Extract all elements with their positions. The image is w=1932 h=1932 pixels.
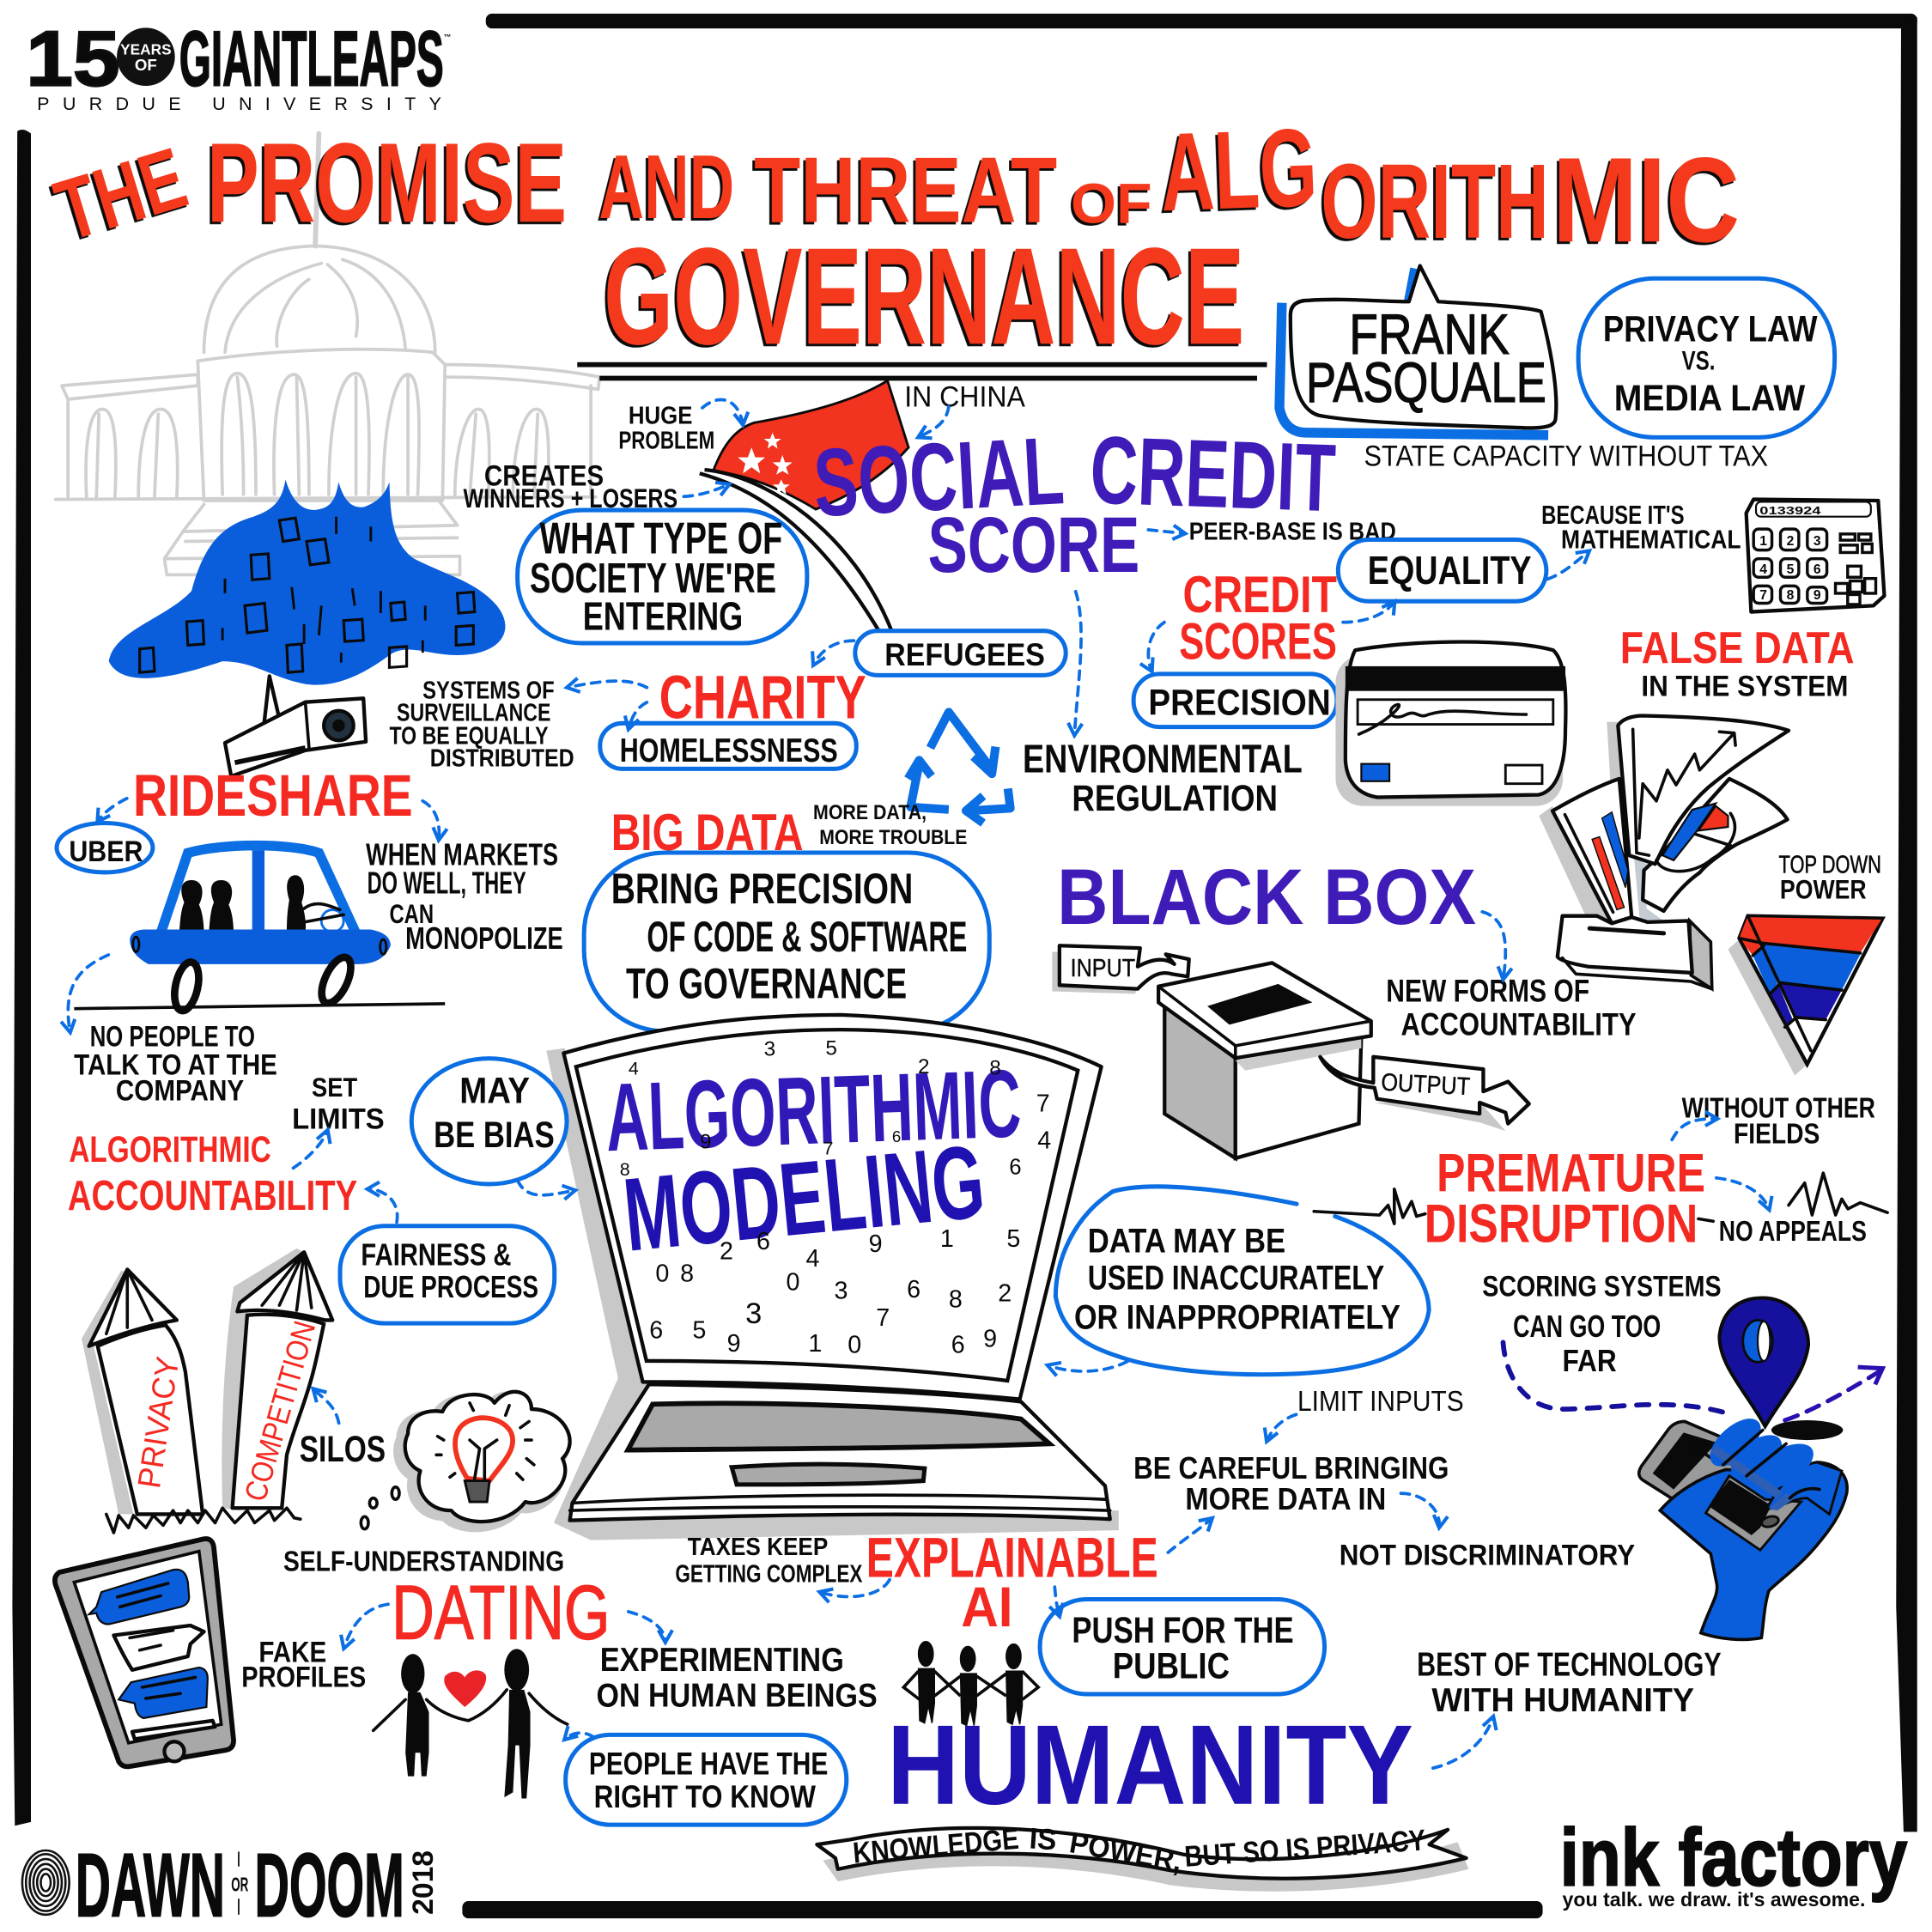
screen digits: 1: [808, 1330, 822, 1358]
screen digits: 9: [869, 1230, 883, 1258]
bubble: may be bias: BE BIAS: [434, 1115, 555, 1156]
title: ORITH: [1321, 143, 1549, 261]
bubble: what type of society: WHAT TYPE OF: [540, 513, 782, 562]
note: top down power: TOP DOWN: [1778, 851, 1881, 878]
note: because it's mathematical: [1541, 501, 1741, 555]
note: when markets do well: CAN: [389, 898, 434, 929]
note: best of technology with humanity: [1417, 1647, 1722, 1719]
illustration: couple holding hands with heart: [374, 1649, 568, 1799]
icon: charts in a ballot box: [1539, 715, 1789, 989]
icon: credit card: [1335, 641, 1565, 806]
screen digits: 6: [756, 1228, 770, 1255]
screen digits: 2: [998, 1279, 1012, 1307]
bubble: push for the public: PUSH FOR THE: [1072, 1610, 1294, 1651]
heading: social credit score: CREDIT: [1089, 416, 1337, 532]
heading: algorithmic accountability: [68, 1129, 357, 1219]
screen digits: 5: [692, 1316, 706, 1344]
title: ALG: [1158, 106, 1319, 234]
note: scoring systems can go too far: [1482, 1271, 1722, 1378]
note: creates winners and losers: [464, 459, 677, 513]
screen heading: algorithmic modeling: ALGORITHMIC: [604, 1048, 1023, 1171]
heading: social credit score: [811, 416, 1337, 589]
screen digits: 3: [745, 1297, 762, 1330]
bubble: privacy law vs media law: VS.: [1682, 344, 1715, 375]
bubble: may be bias: MAY: [459, 1070, 530, 1111]
screen heading: algorithmic modeling: [604, 1048, 1023, 1273]
note: set limits: [292, 1072, 385, 1135]
heading: false data in the system: [1620, 623, 1855, 703]
pulse lines: [1314, 1173, 1887, 1224]
screen digits: 9: [727, 1330, 741, 1358]
title: AND: [598, 136, 734, 238]
label: input: [1052, 945, 1189, 993]
bubble: what type of society: [518, 510, 807, 643]
banner: knowledge is power, but so is privacy: POWER,: [1067, 1826, 1184, 1879]
screen digits: 0: [848, 1332, 861, 1359]
bubble: privacy law vs media law: [1578, 278, 1835, 437]
illustration: competition silo: COMPETITION: [237, 1317, 322, 1505]
note: no people to talk to: NO PEOPLE TO: [90, 1020, 255, 1053]
bubble: data may be used inaccurately: USED INACCURATELY: [1088, 1258, 1384, 1297]
bubble: fairness and due process: [340, 1226, 555, 1323]
bubble: fairness and due process: DUE PROCESS: [363, 1270, 538, 1304]
bubble: homelessness: HOMELESSNESS: [620, 732, 838, 769]
bubble: data may be used inaccurately: DATA MAY BE: [1088, 1221, 1285, 1260]
note: new forms of accountability: NEW FORMS OF: [1386, 973, 1589, 1009]
bubble: bring precision of code and software to governance: TO GOVERNANCE: [626, 959, 907, 1007]
illustration: privacy silo: PRIVACY: [131, 1354, 185, 1491]
note: because it's mathematical: MATHEMATICAL: [1561, 526, 1741, 555]
bubble: privacy law vs media law: PRIVACY LAW: [1603, 308, 1818, 349]
note: fake profiles: FAKE: [258, 1637, 326, 1669]
icon: light bulb thought cloud: [361, 1392, 570, 1529]
heading: premature disruption: [1425, 1144, 1705, 1254]
screen digits: 9: [700, 1130, 712, 1153]
bubble: people have the right to know: PEOPLE HAVE THE: [589, 1745, 828, 1781]
note: taxes keep getting complex: TAXES KEEP: [688, 1534, 828, 1561]
bubble: homelessness: [600, 723, 856, 769]
illustration: privacy silo: [82, 1269, 203, 1514]
bubble: push for the public: [1040, 1600, 1325, 1694]
heading: premature disruption: PREMATURE: [1437, 1144, 1705, 1204]
note: state capacity without tax: STATE CAPACITY WITHOUT TAX: [1364, 440, 1768, 472]
title: [46, 106, 1740, 374]
note: when markets do well: DO WELL, THEY: [368, 866, 526, 900]
note: silos: SILOS: [300, 1429, 386, 1470]
note: experimenting on human beings: [597, 1642, 878, 1714]
note: fake profiles: PROFILES: [241, 1661, 366, 1693]
note: set limits: LIMITS: [292, 1103, 385, 1135]
bubble: privacy law vs media law: MEDIA LAW: [1614, 378, 1806, 419]
illustration: hand holding phone with location pin: [1503, 1298, 1882, 1639]
icon: layered pyramid: [1728, 916, 1882, 1075]
illustration: laptop with algorithmic modeling screen: [546, 1015, 1119, 1540]
heading: black box: BLACK BOX: [1057, 854, 1476, 941]
screen digits: 6: [1009, 1155, 1022, 1179]
banner: knowledge is power, but so is privacy: BUT SO IS PRIVACY: [1183, 1824, 1427, 1874]
note: environmental regulation: [1023, 737, 1303, 819]
logo: Dawn or Doom 2018: [22, 1835, 440, 1932]
heading: credit scores: CREDIT: [1183, 565, 1337, 623]
note: environmental regulation: ENVIRONMENTAL: [1023, 737, 1303, 781]
note: without other fields: WITHOUT OTHER: [1682, 1091, 1875, 1123]
note: creates winners and losers: CREATES: [484, 459, 604, 492]
logo: 150 years of giant leaps, Purdue University: 15: [26, 15, 120, 102]
speaker box: Frank Pasquale: FRANK: [1349, 302, 1510, 366]
bubble: precision: PRECISION: [1148, 682, 1331, 723]
heading: explainable AI: AI: [961, 1575, 1013, 1638]
note: new forms of accountability: [1386, 973, 1637, 1042]
heading: rideshare: RIDESHARE: [133, 762, 413, 829]
screen digits: 7: [1036, 1090, 1050, 1117]
note: environmental regulation: REGULATION: [1072, 778, 1278, 819]
logo: 150 years of giant leaps, Purdue University: YEARS: [120, 40, 172, 58]
screen digits: 6: [649, 1316, 663, 1344]
heading: big data: BIG DATA: [611, 803, 804, 861]
heading: credit scores: SCORES: [1179, 612, 1337, 671]
note: charity systems of surveillance: SYSTEMS OF: [422, 677, 555, 705]
screen digits: 8: [680, 1260, 694, 1287]
note: charity systems of surveillance: DISTRIBUTED: [430, 745, 574, 773]
heading: social credit score: SCORE: [928, 501, 1139, 589]
bubble: precision: [1133, 674, 1337, 727]
illustration: red flag on curved pole: [700, 380, 908, 633]
note: best of technology with humanity: WITH HUMANITY: [1431, 1682, 1694, 1719]
screen digits: 4: [805, 1245, 819, 1273]
screen digits: 6: [951, 1332, 965, 1359]
icon: recycle arrows: [908, 712, 1011, 823]
note: top down power: [1778, 851, 1881, 905]
illustration: black box machine: [1158, 963, 1371, 1158]
illustration: three people holding hands: [903, 1642, 1038, 1726]
bubble: may be bias: [411, 1059, 567, 1184]
note: self-understanding: SELF-UNDERSTANDING: [283, 1546, 564, 1577]
note: be careful bringing more data in: BE CAREFUL BRINGING: [1133, 1451, 1449, 1485]
illustration: blue car with passengers: [74, 846, 445, 1013]
screen digits: 4: [629, 1058, 639, 1078]
screen digits: [620, 1036, 1051, 1359]
note: scoring systems can go too far: CAN GO TOO: [1513, 1309, 1661, 1344]
screen digits: 0: [655, 1260, 669, 1287]
note: be careful bringing more data in: MORE DATA IN: [1185, 1482, 1386, 1516]
bubble: people have the right to know: [566, 1735, 847, 1825]
screen digits: 3: [834, 1277, 848, 1304]
heading: false data in the system: FALSE DATA: [1620, 623, 1855, 672]
heading: algorithmic accountability: ALGORITHMIC: [69, 1129, 271, 1170]
icon: calculator: 8: [1787, 588, 1795, 603]
heading: credit scores: [1179, 565, 1337, 671]
bubble: bring precision of code and software to governance: BRING PRECISION: [611, 865, 913, 913]
note: charity systems of surveillance: SURVEILLANCE: [397, 699, 550, 726]
note: be careful bringing more data in: [1133, 1451, 1449, 1516]
bubble: refugees: REFUGEES: [884, 636, 1045, 672]
note: new forms of accountability: ACCOUNTABILITY: [1401, 1005, 1637, 1042]
note: peer-base is bad: PEER-BASE IS BAD: [1189, 519, 1396, 546]
screen digits: 9: [983, 1325, 997, 1352]
illustration: blue city blob: [109, 480, 505, 685]
note: fake profiles: [241, 1637, 366, 1693]
icon: calculator: 2: [1787, 534, 1795, 549]
note: when markets do well: [366, 837, 563, 956]
heading: false data in the system: IN THE SYSTEM: [1641, 671, 1848, 703]
illustration: capitol building: [56, 133, 599, 574]
heading: charity: CHARITY: [659, 664, 866, 732]
connector arrows: [68, 399, 1770, 1768]
heading: explainable AI: [866, 1526, 1158, 1638]
note: taxes keep getting complex: GETTING COMPLEX: [675, 1560, 862, 1588]
icon: calculator: 6: [1814, 562, 1821, 577]
note: set limits: SET: [312, 1072, 357, 1103]
icon: calculator: 3: [1814, 534, 1821, 549]
note: experimenting on human beings: EXPERIMENTING: [600, 1642, 844, 1679]
heading: premature disruption: DISRUPTION: [1425, 1194, 1698, 1254]
bubble: bring precision of code and software to governance: [584, 853, 989, 1031]
note: huge problem: PROBLEM: [618, 427, 714, 454]
screen digits: 7: [823, 1139, 834, 1159]
banner: knowledge is power, but so is privacy: KNOWLEDGE: [852, 1823, 1020, 1870]
logo: 150 years of giant leaps, Purdue University: [26, 15, 451, 114]
bubble: bring precision of code and software to governance: OF CODE & SOFTWARE: [647, 913, 967, 961]
note: more data, more trouble: MORE TROUBLE: [819, 826, 967, 849]
note: charity systems of surveillance: TO BE EQUALLY: [389, 723, 549, 750]
screen digits: 2: [720, 1238, 733, 1266]
label: output arrow: [1320, 1057, 1529, 1131]
screen digits: 5: [1006, 1225, 1020, 1253]
note: because it's mathematical: BECAUSE IT'S: [1541, 501, 1685, 530]
bubble: what type of society: SOCIETY WE'RE: [530, 556, 776, 602]
logo: 150 years of giant leaps, Purdue University: GIANTLEAPS: [179, 15, 444, 102]
screen digits: 6: [907, 1276, 920, 1303]
banner: knowledge is power, but so is privacy: IS: [1029, 1822, 1058, 1857]
bubble: equality: EQUALITY: [1368, 548, 1532, 592]
screen digits: 8: [620, 1159, 630, 1180]
bubble: people have the right to know: RIGHT TO KNOW: [594, 1778, 817, 1814]
title: PROMISE: [207, 118, 567, 246]
heading: social credit score: SOCIAL: [811, 416, 1066, 537]
bubble: push for the public: PUBLIC: [1113, 1645, 1230, 1686]
speaker box: Frank Pasquale: [1279, 266, 1556, 435]
label: input: INPUT: [1071, 955, 1135, 982]
screen digits: 4: [1037, 1127, 1051, 1154]
icon: calculator: 9: [1814, 588, 1821, 603]
grass scribble: [106, 1508, 301, 1533]
icon: calculator: [1747, 500, 1884, 612]
icon: surveillance camera: [225, 676, 366, 776]
heading: algorithmic accountability: ACCOUNTABILITY: [68, 1173, 357, 1219]
icon: calculator: 5: [1787, 562, 1795, 577]
note: without other fields: [1682, 1091, 1875, 1150]
label: output arrow: OUTPUT: [1381, 1069, 1471, 1101]
title: THE: [46, 130, 197, 259]
title: MIC: [1552, 132, 1740, 267]
screen heading: algorithmic modeling: MODELING: [619, 1123, 989, 1273]
illustration: phone with chat bubbles: [55, 1539, 234, 1766]
bubble: what type of society: ENTERING: [583, 593, 743, 638]
note: in China: IN CHINA: [904, 381, 1025, 414]
note: best of technology with humanity: BEST OF TECHNOLOGY: [1417, 1647, 1722, 1684]
heading: humanity: HUMANITY: [887, 1701, 1413, 1828]
illustration: competition silo: [222, 1249, 332, 1510]
bubble: data may be used inaccurately: OR INAPPROPRIATELY: [1074, 1298, 1400, 1337]
screen digits: 2: [918, 1055, 930, 1078]
note: not discriminatory: NOT DISCRIMINATORY: [1340, 1539, 1635, 1571]
bubble: refugees: [855, 631, 1066, 675]
note: more data, more trouble: [813, 801, 967, 849]
title underline: [577, 362, 1267, 380]
note: scoring systems can go too far: SCORING SYSTEMS: [1482, 1271, 1722, 1303]
note: when markets do well: WHEN MARKETS: [366, 837, 558, 872]
title: OF: [1071, 172, 1152, 235]
icon: calculator: 0133924: [1759, 504, 1822, 517]
heading: dating: DATING: [392, 1569, 610, 1655]
note: huge problem: [618, 403, 714, 454]
note: taxes keep getting complex: [675, 1534, 862, 1588]
screen digits: 3: [764, 1038, 775, 1061]
note: no people to talk to: [74, 1020, 277, 1107]
note: top down power: POWER: [1780, 874, 1867, 905]
screen digits: 8: [949, 1285, 963, 1313]
logo: Dawn or Doom 2018: 2018: [407, 1850, 440, 1915]
screen digits: 8: [989, 1056, 1001, 1079]
bubble: Uber: [57, 823, 153, 872]
logo: Dawn or Doom 2018: OR: [231, 1873, 249, 1895]
logo: 150 years of giant leaps, Purdue University: PURDUE UNIVERSITY: [37, 93, 441, 114]
bubble: fairness and due process: FAIRNESS &: [361, 1238, 511, 1273]
logo: 150 years of giant leaps, Purdue University: OF: [135, 56, 157, 74]
note: charity systems of surveillance: [389, 677, 574, 773]
screen digits: 6: [892, 1127, 901, 1145]
heading: explainable AI: EXPLAINABLE: [866, 1526, 1158, 1589]
screen digits: 5: [825, 1036, 837, 1060]
note: creates winners and losers: WINNERS + LOSERS: [464, 483, 677, 513]
note: huge problem: HUGE: [629, 403, 692, 430]
logo: 150 years of giant leaps, Purdue University: ™: [444, 33, 451, 41]
note: no appeals: NO APPEALS: [1719, 1215, 1867, 1247]
note: no people to talk to: COMPANY: [116, 1074, 244, 1107]
bubble: data may be used inaccurately: [1055, 1187, 1429, 1375]
note: experimenting on human beings: ON HUMAN BEINGS: [597, 1677, 878, 1714]
note: limit inputs: LIMIT INPUTS: [1297, 1385, 1464, 1417]
note: without other fields: FIELDS: [1734, 1118, 1820, 1150]
banner: knowledge is power, but so is privacy: [817, 1822, 1468, 1892]
note: when markets do well: MONOPOLIZE: [405, 921, 563, 956]
speaker box: Frank Pasquale: PASQUALE: [1306, 350, 1546, 414]
note: no people to talk to: TALK TO AT THE: [74, 1048, 277, 1081]
bubble: Uber: UBER: [69, 835, 143, 868]
screen digits: 1: [940, 1225, 954, 1253]
note: more data, more trouble: MORE DATA,: [813, 801, 927, 824]
note: scoring systems can go too far: FAR: [1562, 1344, 1617, 1378]
icon: calculator: 1: [1759, 534, 1767, 549]
title: THREAT: [754, 137, 1057, 242]
icon: calculator: 4: [1759, 562, 1767, 577]
screen digits: 0: [786, 1268, 799, 1296]
bubble: equality: [1338, 540, 1546, 601]
title: GOVERNANCE: [604, 220, 1244, 374]
logo: ink factory: you talk. we draw. it's awesome.: [1562, 1888, 1865, 1911]
icon: calculator: 7: [1759, 588, 1767, 603]
screen digits: 7: [876, 1304, 890, 1332]
